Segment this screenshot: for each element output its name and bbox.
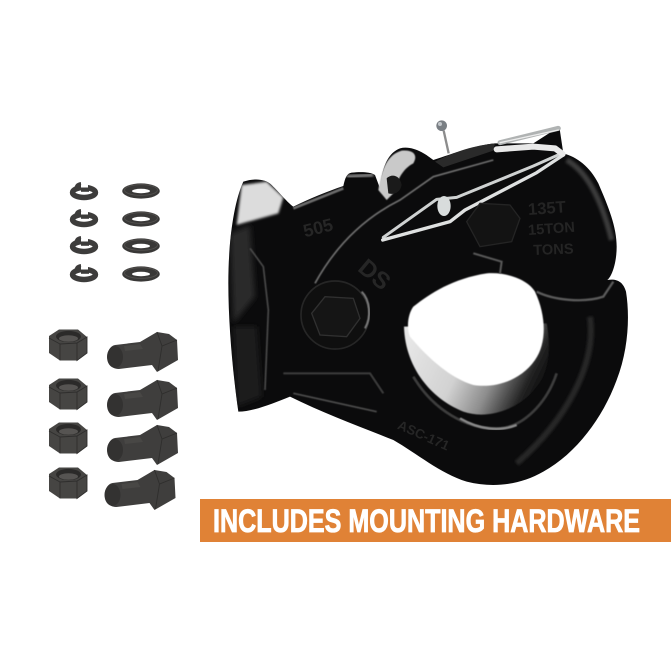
banner [200,499,671,542]
embossed rating plate [527,197,575,259]
embossed casting marks: ASC-171 [395,417,452,454]
hook opening [408,273,544,386]
pin and ball [436,120,449,153]
embossed casting marks [301,215,452,454]
hex nuts [49,330,87,498]
flat washers [122,183,160,282]
embossed rating plate: 135T [527,197,566,219]
inner barrel shading [404,323,549,415]
embossed rating plate: 15TON [527,220,575,239]
pintle hook [228,120,628,485]
surface highlights [230,160,613,463]
hook body [228,127,628,485]
embossed casting marks: 505 [301,215,335,241]
embossed rating plate: TONS [533,242,574,259]
latch lower edge highlight [473,253,502,273]
lock washers [72,184,96,280]
spring clip [383,128,563,240]
latch knob [378,150,415,200]
pivot bolt [301,281,369,349]
plate highlights [237,182,283,225]
embossed casting marks: DS [353,254,396,296]
clip pin [437,196,451,216]
bolts [104,332,178,510]
upper bolt head [467,203,520,247]
latch arm edge [315,160,493,283]
